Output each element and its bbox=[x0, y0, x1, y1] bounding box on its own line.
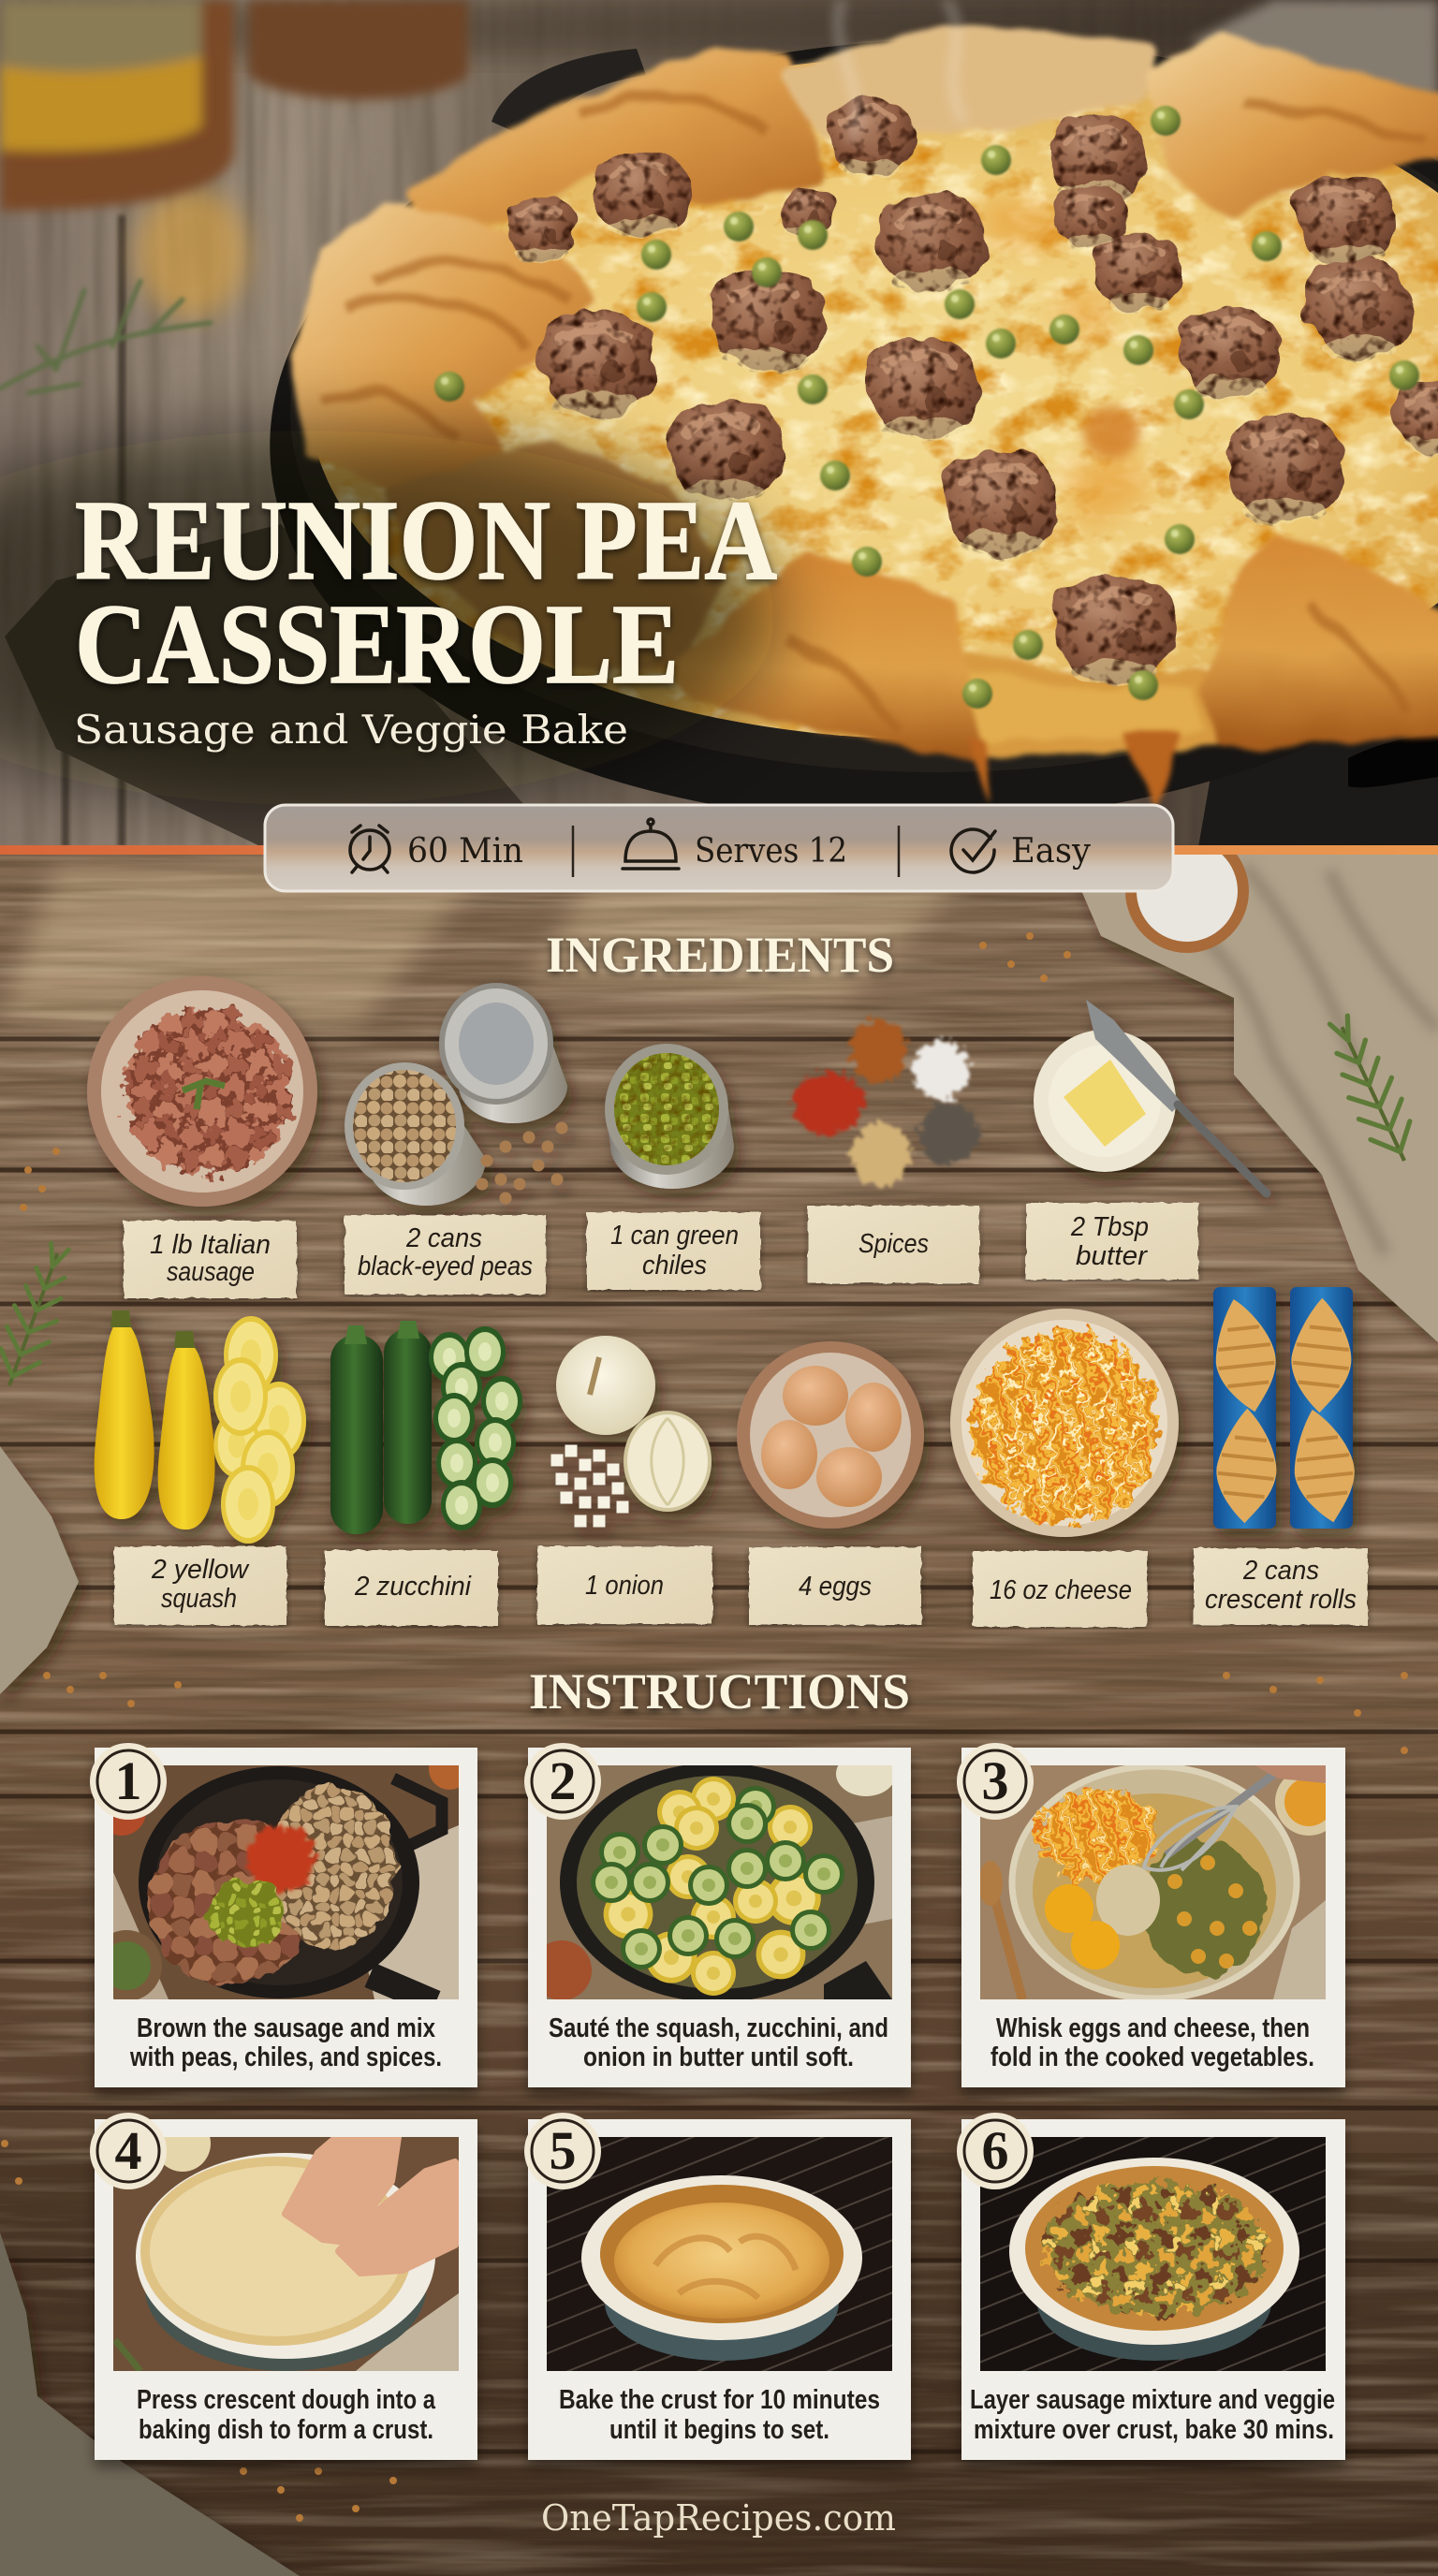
step 6 text bbox=[970, 2385, 1335, 2445]
number badge 4: 4 bbox=[114, 2120, 142, 2181]
label: 1 lb Italian sausage: 1 lb Italian bbox=[150, 1230, 271, 1260]
label: 2 cans crescent rolls: crescent rolls bbox=[1205, 1585, 1357, 1615]
label: 1 can green chiles: chiles bbox=[642, 1251, 707, 1281]
step 3 text bbox=[990, 2013, 1314, 2072]
ingredient: crescent roll cans bbox=[1210, 1287, 1359, 1529]
step 2 text bbox=[549, 2013, 888, 2072]
label: 2 Tbsp butter: 2 Tbsp bbox=[1070, 1212, 1149, 1242]
crust: top right bbox=[1156, 43, 1438, 206]
text: time: 60 Min bbox=[407, 832, 523, 871]
label: spices: Spices bbox=[858, 1229, 929, 1259]
label: 4 eggs: 4 eggs bbox=[799, 1572, 872, 1602]
open can of peas bbox=[345, 1062, 486, 1206]
decor: bottom left linen cloth bbox=[0, 2232, 300, 2576]
crescent crust pieces bbox=[302, 35, 1438, 805]
crust: top centre bbox=[789, 35, 1147, 126]
label: 4 eggs bbox=[749, 1547, 921, 1625]
label: 2 cans black-eyed peas: 2 cans bbox=[405, 1223, 482, 1253]
label: 2 zucchini: 2 zucchini bbox=[354, 1572, 472, 1602]
label: 16 oz cheese bbox=[973, 1551, 1147, 1627]
number badge 6 bbox=[957, 2113, 1034, 2189]
icon: check circle bbox=[951, 829, 995, 872]
title bbox=[75, 477, 777, 708]
label: 2 yellow squash: 2 yellow bbox=[151, 1555, 250, 1585]
step 3 photo: glass bowl with eggs, cheese, vegetables and whisk bbox=[978, 1765, 1343, 1999]
top right cloth bbox=[1189, 0, 1438, 103]
step card 6 bbox=[957, 2113, 1345, 2460]
ingredient: eggs bowl bbox=[737, 1341, 924, 1529]
step 3 text: Whisk eggs and cheese, then bbox=[996, 2013, 1310, 2043]
ingredient: spices bbox=[793, 1018, 979, 1187]
step 4 text bbox=[137, 2385, 436, 2445]
label: 1 lb Italian sausage bbox=[124, 1221, 297, 1298]
skillet bbox=[257, 16, 1438, 847]
number badge 1 bbox=[90, 1743, 167, 1820]
step card 1 bbox=[90, 1743, 477, 2087]
label: 1 can green chiles: 1 can green bbox=[610, 1221, 739, 1251]
label: 2 cans black-eyed peas bbox=[345, 1215, 546, 1295]
ingredient: shredded cheese bowl bbox=[950, 1309, 1179, 1537]
step card 5 bbox=[524, 2113, 911, 2460]
label: 2 zucchini bbox=[325, 1550, 498, 1626]
step 5 photo: crust baking in oven bbox=[547, 2137, 892, 2371]
label: 2 yellow squash bbox=[114, 1546, 286, 1625]
info pill bbox=[265, 805, 1173, 891]
crust: bottom left front bbox=[679, 562, 973, 756]
label: 2 cans black-eyed peas: black-eyed peas bbox=[358, 1251, 533, 1281]
decor: thyme sprig left bbox=[0, 1238, 81, 1393]
peas bbox=[434, 106, 1419, 709]
label: 2 Tbsp butter bbox=[1026, 1203, 1198, 1280]
wooden jar bbox=[248, 0, 468, 99]
number badge 6: 6 bbox=[981, 2120, 1009, 2181]
decor: left linen cloth bbox=[0, 1446, 79, 1694]
amber glass and bowl bbox=[0, 0, 234, 211]
label: 16 oz cheese: 16 oz cheese bbox=[990, 1575, 1132, 1605]
background: lower rustic wood table bbox=[0, 847, 1438, 2576]
label: 1 onion bbox=[537, 1546, 712, 1624]
number badge 5 bbox=[524, 2113, 601, 2189]
decor: scattered crumbs bbox=[5, 936, 1404, 2518]
step 1 text: Brown the sausage and mix bbox=[137, 2013, 435, 2043]
step 5 text bbox=[559, 2385, 880, 2445]
step 1 photo: skillet with sausage, peas, chiles, spices bbox=[91, 1749, 470, 2003]
step 5 text: Bake the crust for 10 minutes bbox=[559, 2385, 880, 2415]
hero photo: casserole in skillet bbox=[0, 0, 1438, 847]
label: 2 cans crescent rolls: 2 cans bbox=[1242, 1556, 1319, 1586]
hands bbox=[286, 2137, 455, 2273]
step 6 text: mixture over crust, bake 30 mins. bbox=[974, 2415, 1334, 2445]
crust: bottom centre bbox=[955, 659, 1211, 751]
orange divider bar bbox=[0, 845, 1438, 855]
ingredient: green chiles can bbox=[605, 1044, 734, 1189]
decor: rosemary sprig right bbox=[1317, 1010, 1426, 1171]
text: difficulty: Easy bbox=[1011, 832, 1092, 871]
ingredient: zucchini bbox=[330, 1321, 522, 1534]
number badge 2 bbox=[524, 1743, 601, 1820]
label: 1 lb Italian sausage: sausage bbox=[167, 1257, 255, 1287]
herb sprig on table bbox=[0, 281, 211, 393]
label: 1 can green chiles bbox=[587, 1212, 760, 1290]
loose peas bbox=[482, 1128, 562, 1198]
step 6 photo: layered casserole in oven bbox=[980, 2137, 1326, 2371]
sausage pieces bbox=[506, 97, 1438, 686]
step 2 photo: squash and zucchini in skillet bbox=[532, 1751, 896, 2002]
number badge 4 bbox=[90, 2113, 167, 2189]
step 2 text: Sauté the squash, zucchini, and bbox=[549, 2013, 888, 2043]
step 6 text: Layer sausage mixture and veggie bbox=[970, 2385, 1335, 2415]
step 5 text: until it begins to set. bbox=[609, 2415, 829, 2445]
step card 2 bbox=[524, 1743, 911, 2087]
closed can bbox=[442, 986, 567, 1123]
step 1 text bbox=[129, 2013, 442, 2072]
label: 2 Tbsp butter: butter bbox=[1076, 1241, 1148, 1271]
step 1 text: with peas, chiles, and spices. bbox=[129, 2042, 442, 2072]
crust: top left bbox=[413, 57, 817, 212]
number badge 5: 5 bbox=[549, 2120, 577, 2181]
step card 3 bbox=[957, 1743, 1345, 2087]
label: 1 onion: 1 onion bbox=[585, 1571, 664, 1601]
icon: serving cloche bbox=[623, 819, 679, 869]
ingredient: onion bbox=[556, 1336, 710, 1521]
number badge 1: 1 bbox=[114, 1750, 142, 1811]
number badge 3 bbox=[957, 1743, 1034, 1820]
footer website: OneTapRecipes.com bbox=[541, 2497, 896, 2539]
dark cloth under skillet bbox=[5, 524, 524, 847]
ingredient: yellow squash bbox=[95, 1310, 306, 1544]
ingredient: butter on plate with knife bbox=[1034, 1000, 1267, 1193]
label: 2 yellow squash: squash bbox=[161, 1584, 237, 1614]
step 4 text: baking dish to form a crust. bbox=[139, 2415, 433, 2445]
label: spices bbox=[808, 1206, 979, 1283]
ingredient: black-eyed peas cans bbox=[345, 986, 567, 1206]
icon: alarm clock bbox=[350, 826, 389, 872]
number badge 2: 2 bbox=[549, 1750, 577, 1811]
crust: large left roll bbox=[302, 212, 587, 481]
decor: salt bowl bbox=[1125, 829, 1249, 953]
step card 4 bbox=[90, 2113, 477, 2460]
step 2 text: onion in butter until soft. bbox=[583, 2042, 854, 2072]
melted cheese bbox=[309, 56, 1438, 739]
step 4 photo: pressing dough into dish bbox=[113, 2115, 459, 2371]
heading: instructions: INSTRUCTIONS bbox=[529, 1663, 910, 1720]
ingredient: sausage bowl bbox=[87, 976, 317, 1207]
decor: top right linen cloth bbox=[1063, 847, 1438, 1342]
dark shade behind title bbox=[0, 431, 777, 805]
step 4 text: Press crescent dough into a bbox=[137, 2385, 436, 2415]
crust: lower left bbox=[395, 453, 716, 659]
hero wood table bbox=[0, 0, 1438, 847]
text: servings: Serves 12 bbox=[695, 832, 847, 871]
number badge 3: 3 bbox=[981, 1750, 1009, 1811]
heading: ingredients: INGREDIENTS bbox=[546, 927, 894, 983]
crust: bottom right bbox=[1211, 542, 1438, 739]
title: CASSEROLE bbox=[75, 581, 679, 708]
subtitle: Sausage and Veggie Bake bbox=[74, 707, 628, 753]
title: REUNION PEA bbox=[75, 477, 777, 604]
step 3 text: fold in the cooked vegetables. bbox=[990, 2042, 1314, 2072]
label: 2 cans crescent rolls bbox=[1194, 1548, 1368, 1625]
steam bbox=[838, 0, 964, 140]
